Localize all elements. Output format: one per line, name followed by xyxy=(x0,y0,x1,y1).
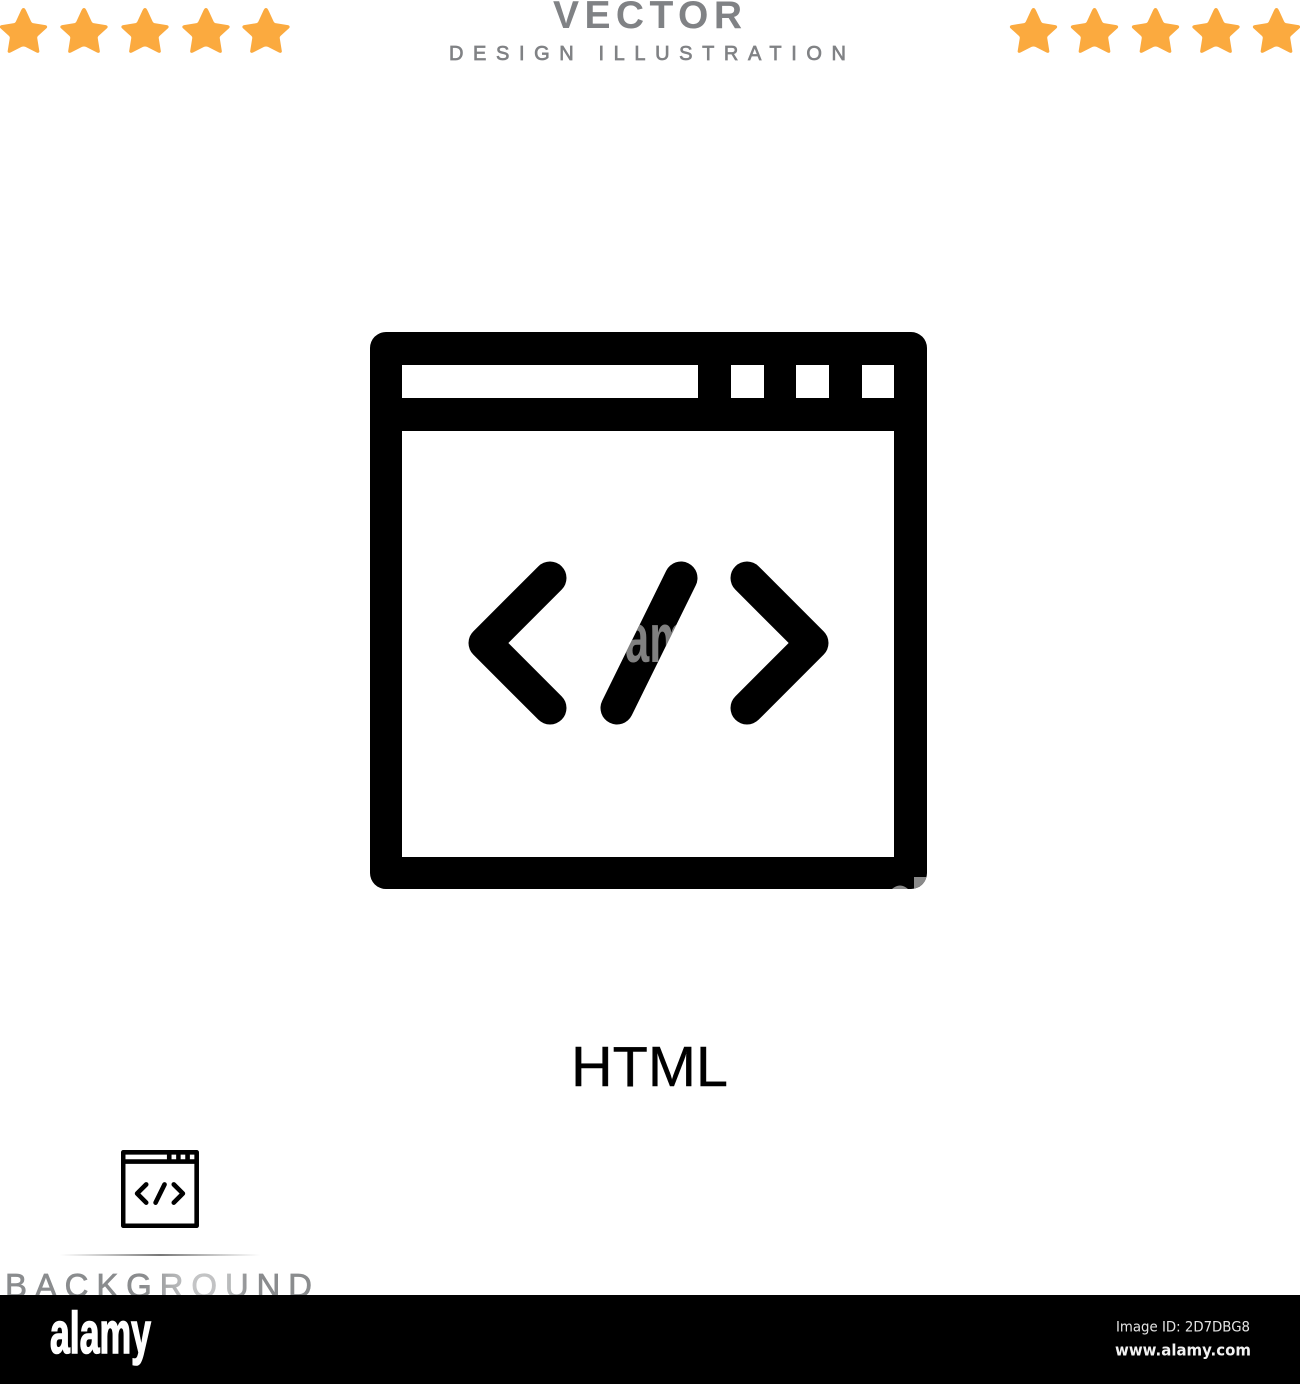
code symbol: angle brackets and slash xyxy=(485,578,812,708)
footer logo: alamy: alamy xyxy=(50,1301,151,1366)
watermark fragment on slash: am xyxy=(625,599,688,677)
left star rating xyxy=(0,8,290,53)
right star rating xyxy=(1010,8,1300,53)
small icon: browser window with code xyxy=(121,1150,199,1228)
divider line xyxy=(60,1254,260,1256)
footer image id: Image ID: 2D7DBG8 xyxy=(1116,1320,1250,1336)
footer bar xyxy=(0,1295,1300,1384)
subheading: design illustration: DESIGN ILLUSTRATION xyxy=(449,43,846,65)
footer website: www.alamy.com xyxy=(1115,1340,1251,1360)
main icon: browser window with code xyxy=(370,332,927,889)
label: background: BACKGROUND xyxy=(5,1267,312,1304)
watermark fragment on frame corner xyxy=(892,877,926,889)
label: HTML: HTML xyxy=(571,1035,728,1099)
browser window frame xyxy=(370,332,927,889)
